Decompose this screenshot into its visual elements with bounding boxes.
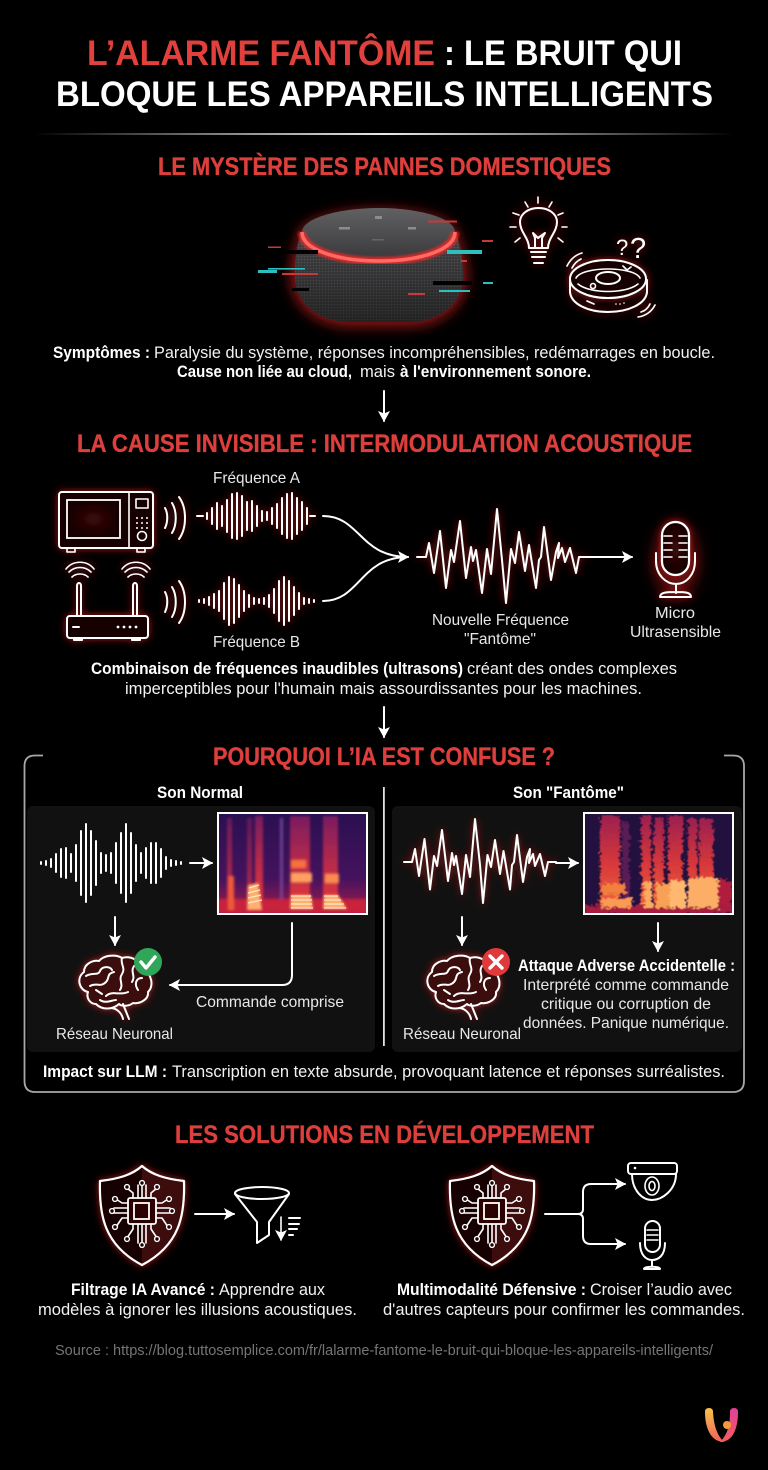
title: : LE BRUIT QUI xyxy=(444,34,682,73)
text: filtrage IA avancé: Apprendre aux xyxy=(219,1280,325,1299)
label: micro ultrasensible: Ultrasensible xyxy=(630,624,721,641)
source: Source : https://blog.tuttosemplice.com/fr/lalarme-fantome-le-bruit-qui-bloque-les-appareils-intelligents/ xyxy=(55,1343,714,1359)
chart: ghost spectrogram xyxy=(584,813,733,914)
arrow: waveform to spectrogram xyxy=(556,862,578,864)
arrow: waveform to spectrogram xyxy=(190,862,212,864)
chart: waveform A xyxy=(197,493,315,539)
label: nouvelle fréquence fantôme: Nouvelle Fréquence xyxy=(432,612,569,629)
icon: light bulb xyxy=(510,197,567,263)
title xyxy=(56,33,713,114)
arrow: branching to camera and microphone xyxy=(545,1184,625,1244)
icon: sound waves A xyxy=(165,497,185,539)
heading: la cause invisible: LA CAUSE INVISIBLE : INTERMODULATION ACOUSTIQUE xyxy=(77,430,692,458)
icon: sound waves B xyxy=(165,581,185,623)
label: fréquence A: Fréquence A xyxy=(213,470,300,487)
heading: pourquoi l'IA est confuse: POURQUOI L’IA EST CONFUSE ? xyxy=(213,743,555,771)
icon: shield chip 2 xyxy=(450,1166,534,1265)
label: commande comprise: Commande comprise xyxy=(196,994,344,1011)
chart: ghost waveform xyxy=(404,819,556,903)
icon: brain xyxy=(427,956,499,1019)
label: nouvelle fréquence fantôme xyxy=(432,612,569,648)
text: symptômes: Symptômes : xyxy=(53,343,150,362)
icon: red cross xyxy=(482,948,510,976)
title: L’ALARME FANTÔME xyxy=(87,33,435,73)
text: symptômes: Paralysie du système, réponses incompréhensibles, redémarrages en boucle. xyxy=(154,343,715,362)
text: symptômes xyxy=(53,343,715,381)
chart: ghost waveform xyxy=(417,509,588,603)
icon: microphone xyxy=(640,1221,665,1269)
icon: camera xyxy=(628,1163,677,1200)
label: réseau neuronal: Réseau Neuronal xyxy=(56,1026,173,1043)
icon: microwave xyxy=(59,492,153,552)
chart: normal waveform xyxy=(41,824,181,902)
heading: le mystère des pannes domestiques: LE MYSTÈRE DES PANNES DOMESTIQUES xyxy=(158,152,611,181)
text: symptômes: Cause non liée au cloud, xyxy=(177,362,352,381)
panel: son normal xyxy=(27,783,375,1052)
arrow: shield to funnel xyxy=(195,1213,234,1215)
text: filtrage IA avancé: modèles à ignorer les illusions acoustiques. xyxy=(38,1300,357,1319)
text: filtrage IA avancé: Filtrage IA Avancé : xyxy=(71,1280,215,1299)
text: symptômes: à l'environnement sonore. xyxy=(400,362,591,381)
logo xyxy=(705,1408,738,1442)
icon: microphone xyxy=(652,520,700,600)
icon: robot vacuum: ? xyxy=(630,233,646,265)
heading: son fantôme: Son "Fantôme" xyxy=(513,783,624,802)
arrow: spectrogram to brain xyxy=(170,923,292,985)
text: combinaison de fréquences: créant des ondes complexes xyxy=(467,659,677,678)
panel: pourquoi l'IA est confuse xyxy=(24,743,744,1092)
text: combinaison de fréquences xyxy=(91,659,677,698)
text: combinaison de fréquences: Combinaison de fréquences inaudibles (ultrasons) xyxy=(91,659,463,678)
chart: waveform B xyxy=(199,577,314,625)
curve: frequency A to merge xyxy=(323,516,408,557)
arrow: spectrogram to attack text xyxy=(657,923,659,951)
text: impact sur LLM: Transcription en texte absurde, provoquant latence et réponses surréalistes. xyxy=(172,1062,725,1081)
arrow xyxy=(383,391,385,421)
heading: son normal: Son Normal xyxy=(157,783,243,802)
icon: router xyxy=(66,562,150,640)
chart: normal spectrogram xyxy=(218,813,367,914)
arrow xyxy=(383,707,385,737)
curve: frequency B to merge xyxy=(323,557,408,601)
text: attaque adverse accidentelle: Attaque Adverse Accidentelle : xyxy=(518,957,735,975)
arrow: ghost to microphone xyxy=(588,556,632,558)
text: attaque adverse accidentelle xyxy=(518,957,735,1032)
icon: green check xyxy=(134,948,162,976)
text: attaque adverse accidentelle: données. Panique numérique. xyxy=(523,1015,729,1032)
title: BLOQUE LES APPAREILS INTELLIGENTS xyxy=(56,75,713,114)
icon: smart speaker xyxy=(258,208,493,326)
arrow: waveform to brain xyxy=(114,917,116,945)
label: fréquence B: Fréquence B xyxy=(213,634,300,651)
text: impact sur LLM: Impact sur LLM : xyxy=(43,1062,167,1081)
panel: son fantôme xyxy=(392,783,742,1052)
text: multimodalité défensive xyxy=(383,1280,745,1319)
icon: robot vacuum: ? xyxy=(616,235,628,260)
icon: shield chip 1 xyxy=(100,1166,184,1265)
text: attaque adverse accidentelle: Interprété comme commande xyxy=(523,977,729,994)
label: micro ultrasensible xyxy=(630,605,721,641)
text: multimodalité défensive: Croiser l’audio avec xyxy=(590,1280,732,1299)
text: multimodalité défensive: Multimodalité Défensive : xyxy=(397,1280,586,1299)
text: attaque adverse accidentelle: critique ou corruption de xyxy=(541,996,711,1013)
icon: funnel xyxy=(235,1187,300,1243)
text: filtrage IA avancé xyxy=(38,1280,357,1319)
icon: robot vacuum xyxy=(567,233,655,317)
text: symptômes: mais xyxy=(360,362,395,381)
label: micro ultrasensible: Micro xyxy=(655,605,695,622)
text: multimodalité défensive: d'autres capteurs pour confirmer les commandes. xyxy=(383,1300,745,1319)
arrow: waveform to brain xyxy=(461,917,463,945)
label: nouvelle fréquence fantôme: "Fantôme" xyxy=(464,631,536,648)
text: combinaison de fréquences: imperceptibles pour l'humain mais assourdissantes pour les machines. xyxy=(125,679,642,698)
icon: brain xyxy=(79,956,151,1019)
heading: les solutions en développement: LES SOLUTIONS EN DÉVELOPPEMENT xyxy=(175,1120,594,1149)
label: réseau neuronal: Réseau Neuronal xyxy=(403,1026,521,1043)
